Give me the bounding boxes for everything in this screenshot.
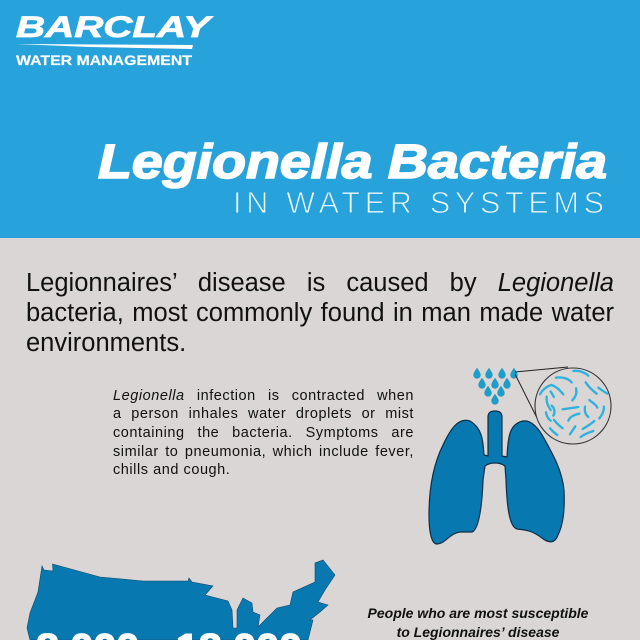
intro paragraph: environments. (26, 328, 186, 356)
icon: water droplets (474, 368, 518, 405)
icon: lungs (429, 411, 564, 544)
icon: magnified bacteria (535, 368, 611, 444)
infection description: Legionella infection is contracted when (113, 388, 414, 404)
subtitle: IN WATER SYSTEMS (233, 186, 604, 220)
infection description: similar to pneumonia, which include fever, (113, 444, 414, 460)
susceptible heading (368, 605, 588, 640)
logo: Barclay Water Management: BARCLAY (16, 11, 214, 44)
intro paragraph: bacteria, most commonly found in man made water (26, 298, 614, 326)
infection description: a person inhales water droplets or mist (113, 406, 414, 422)
title: Legionella Bacteria (98, 136, 607, 189)
infection description: chills and cough. (113, 462, 230, 478)
susceptible heading: to Legionnaires’ disease (397, 624, 559, 640)
intro paragraph (26, 268, 614, 356)
susceptible heading: People who are most susceptible (368, 605, 588, 621)
infection description (113, 388, 414, 478)
infection description: containing the bacteria. Symptoms are (113, 425, 414, 441)
logo: Barclay Water Management: WATER MANAGEMENT (16, 53, 193, 68)
magnifier callout lines (515, 367, 568, 418)
logo: Barclay Water Management (16, 11, 214, 68)
intro paragraph: Legionnaires’ disease is caused by Legionella (26, 268, 614, 296)
header band (0, 0, 640, 238)
map: United States (27, 560, 335, 640)
